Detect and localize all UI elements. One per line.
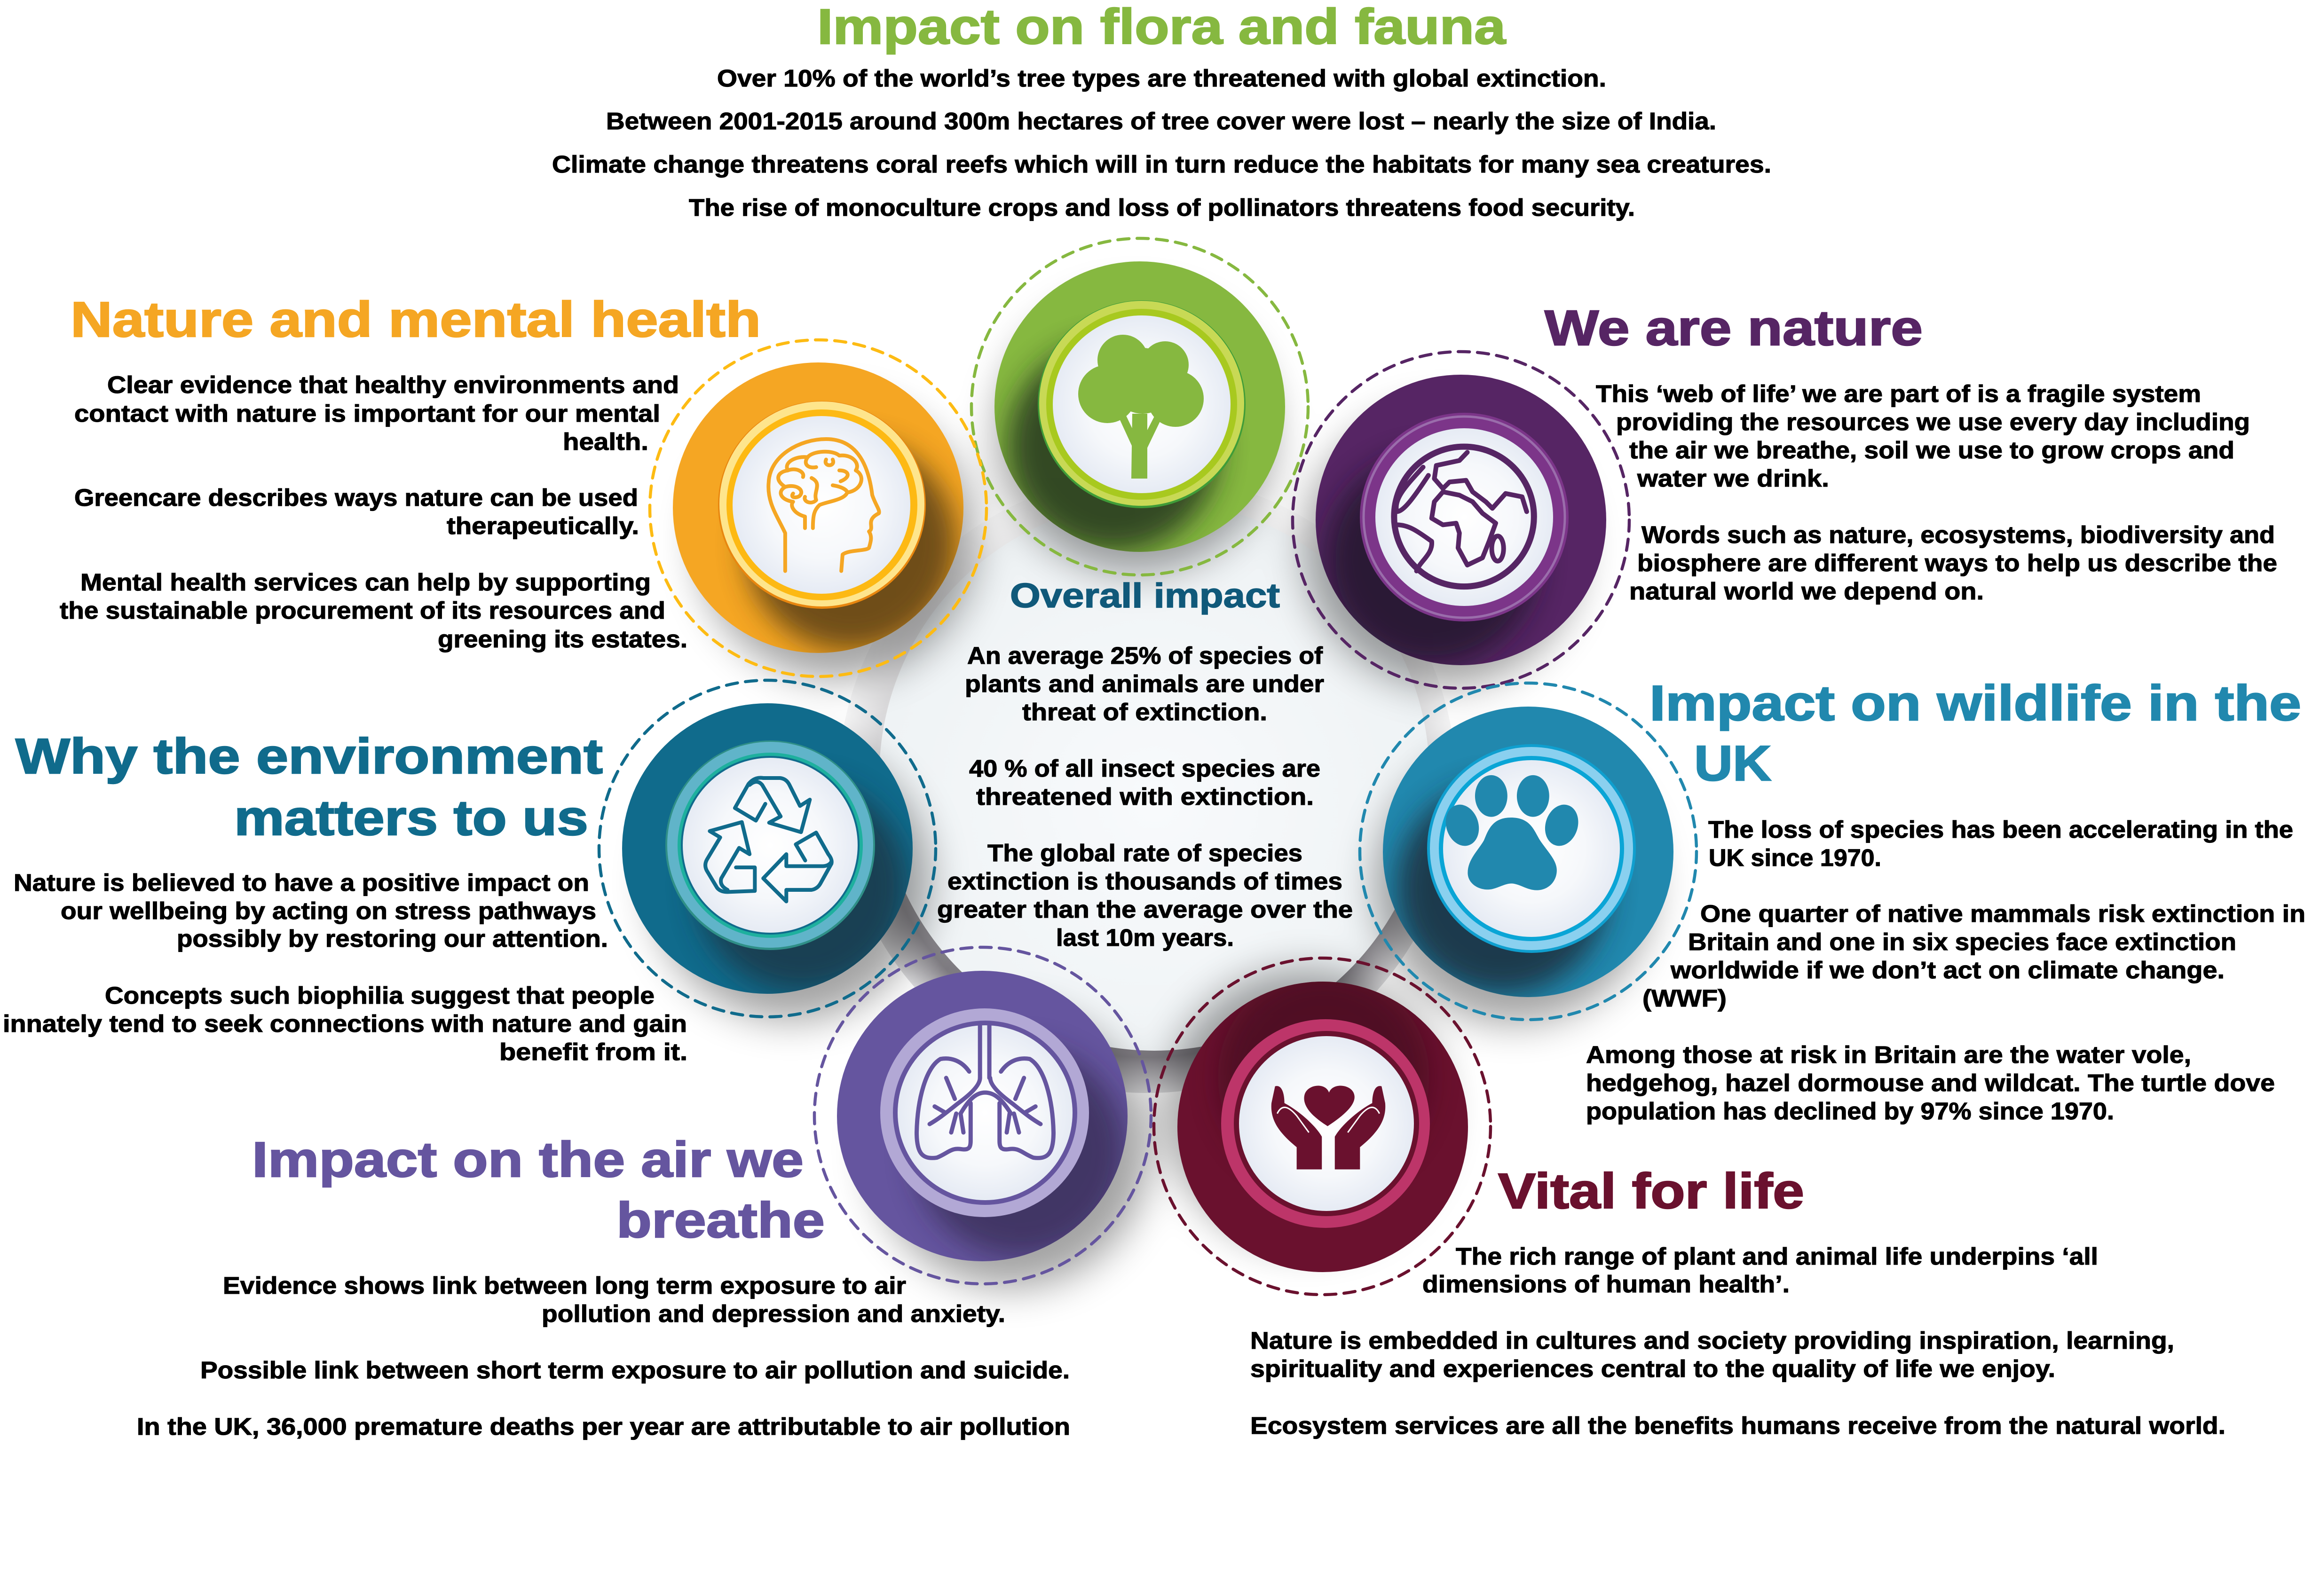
text block: overall impact: extinction is thousands of times [947, 868, 1342, 895]
heading: Impact on wildlife in the UK: Impact on wildlife in the [1649, 676, 2301, 731]
text block: wildlife in the UK: Britain and one in six species face extinction [1688, 928, 2236, 955]
text block: wildlife in the UK: hedgehog, hazel dormouse and wildcat. The turtle dove [1586, 1069, 2275, 1096]
text block: wildlife in the UK: One quarter of native mammals risk extinction in [1700, 900, 2305, 927]
text block: air we breathe: Possible link between short term exposure to air pollution and suicide. [200, 1357, 1070, 1384]
text block: wildlife in the UK [1586, 816, 2305, 1124]
text block: overall impact: An average 25% of species of [967, 642, 1323, 669]
text block: flora and fauna: Over 10% of the world’s tree types are threatened with global extinction. [717, 65, 1606, 92]
text block: overall impact: The global rate of species [987, 840, 1302, 866]
text block: why the environment matters: Concepts such biophilia suggest that people [105, 982, 655, 1009]
text block: why the environment matters: innately tend to seek connections with nature and gain [3, 1010, 687, 1037]
text block: mental health: health. [563, 428, 648, 455]
text block: we are nature: This ‘web of life’ we are part of is a fragile system [1596, 380, 2201, 407]
text block: mental health: greening its estates. [438, 626, 687, 653]
text block: why the environment matters: possibly by restoring our attention. [177, 925, 608, 952]
text block: why the environment matters: our wellbeing by acting on stress pathways [61, 897, 596, 924]
icon: hands holding heart [1271, 1085, 1385, 1170]
text block: wildlife in the UK: worldwide if we don’t act on climate change. [1670, 957, 2225, 983]
text block: flora and fauna: The rise of monoculture crops and loss of pollinators threatens food security. [689, 194, 1635, 221]
text block: air we breathe [137, 1272, 1070, 1440]
panel: central shell background [838, 475, 1456, 1093]
text block: wildlife in the UK: Among those at risk in Britain are the water vole, [1586, 1041, 2191, 1068]
text block: mental health: Mental health services can help by supporting [80, 569, 651, 596]
text block: wildlife in the UK: The loss of species has been accelerating in the [1708, 816, 2293, 843]
heading: Impact on wildlife in the UK: UK [1694, 736, 1771, 791]
icon: head with brain [768, 439, 879, 571]
text block: we are nature: water we drink. [1637, 465, 1829, 492]
badge: wildlife in the UK [1360, 683, 1697, 1020]
text block: vital for life: spirituality and experiences central to the quality of life we enjoy. [1250, 1355, 2055, 1382]
heading: Impact on the air we breathe [252, 1132, 825, 1248]
icon: globe [1394, 447, 1534, 587]
text block: why the environment matters [3, 869, 687, 1065]
heading: Why the environment matters to us [16, 729, 603, 846]
text block: air we breathe: In the UK, 36,000 premature deaths per year are attributable to air pollution [137, 1413, 1070, 1440]
drop shadows of the discs [652, 296, 1653, 1288]
text block: wildlife in the UK: population has declined by 97% since 1970. [1586, 1098, 2114, 1124]
text block: mental health: contact with nature is important for our mental [74, 400, 660, 427]
text block: vital for life: Ecosystem services are all the benefits humans receive from the natural world. [1250, 1412, 2225, 1439]
text block: why the environment matters: benefit from it. [499, 1038, 687, 1065]
badge: mental health [650, 340, 986, 676]
text block: we are nature: the air we breathe, soil we use to grow crops and [1629, 437, 2234, 464]
badge: we are nature [1293, 352, 1629, 688]
badge: why the environment matters [599, 680, 936, 1017]
text block: we are nature: providing the resources we use every day including [1616, 409, 2250, 435]
text block: mental health: therapeutically. [447, 512, 639, 539]
text block: flora and fauna: Climate change threatens coral reefs which will in turn reduce the habitats for many sea creatures. [552, 151, 1771, 178]
icon: paw print [1442, 775, 1582, 890]
text block: vital for life: dimensions of human health’. [1422, 1271, 1790, 1297]
text block: overall impact: plants and animals are under [965, 670, 1324, 697]
text block: we are nature: biosphere are different ways to help us describe the [1637, 550, 2277, 576]
icon: lungs [916, 1025, 1054, 1158]
text block: flora and fauna: Between 2001-2015 around 300m hectares of tree cover were lost – nearly the size of India. [606, 108, 1716, 134]
text block: why the environment matters: Nature is believed to have a positive impact on [14, 869, 589, 896]
heading: Overall impact: Overall impact [1010, 577, 1280, 615]
heading: Impact on wildlife in the UK [1649, 676, 2301, 791]
text block: mental health: Greencare describes ways nature can be used [74, 484, 638, 511]
text block: mental health [60, 371, 687, 653]
text block: overall impact: threatened with extinction. [976, 783, 1314, 810]
text block: we are nature: natural world we depend on. [1629, 578, 1984, 605]
heading: Impact on the air we breathe: breathe [616, 1193, 825, 1248]
heading: Why the environment matters to us: Why the environment [16, 729, 603, 784]
text block: wildlife in the UK: UK since 1970. [1709, 844, 1881, 871]
text block: overall impact: last 10m years. [1056, 924, 1234, 951]
text block: overall impact: threat of extinction. [1022, 699, 1267, 725]
heading: Vital for life: Vital for life [1498, 1164, 1804, 1219]
heading: We are nature: We are nature [1545, 300, 1923, 356]
text block: we are nature [1596, 380, 2277, 605]
text block: overall impact: 40 % of all insect species are [969, 755, 1320, 782]
badge: air we breathe [814, 947, 1151, 1284]
text block: overall impact [937, 642, 1353, 951]
text block: wildlife in the UK: (WWF) [1642, 985, 1727, 1012]
badge: vital for life [1154, 958, 1491, 1295]
icon: tree [1078, 335, 1204, 479]
heading: Impact on flora and fauna: Impact on flora and fauna [817, 0, 1506, 55]
text block: mental health: the sustainable procurement of its resources and [60, 597, 665, 624]
text block: vital for life [1250, 1243, 2225, 1439]
badge: flora and fauna [971, 238, 1308, 575]
text block: air we breathe: Evidence shows link between long term exposure to air [223, 1272, 906, 1299]
text block: vital for life: The rich range of plant and animal life underpins ‘all [1456, 1243, 2098, 1270]
text block: flora and fauna [552, 65, 1771, 221]
heading: Nature and mental health: Nature and mental health [71, 292, 761, 347]
icon: recycling arrows [705, 778, 832, 901]
text block: vital for life: Nature is embedded in cultures and society providing inspiration, learning, [1250, 1327, 2174, 1354]
text block: air we breathe: pollution and depression and anxiety. [542, 1300, 1005, 1327]
text block: overall impact: greater than the average over the [937, 896, 1353, 923]
text block: mental health: Clear evidence that healthy environments and [107, 371, 679, 398]
heading: Impact on the air we breathe: Impact on the air we [252, 1132, 804, 1187]
heading: Why the environment matters to us: matters to us [234, 790, 588, 846]
text block: we are nature: Words such as nature, ecosystems, biodiversity and [1641, 521, 2275, 548]
